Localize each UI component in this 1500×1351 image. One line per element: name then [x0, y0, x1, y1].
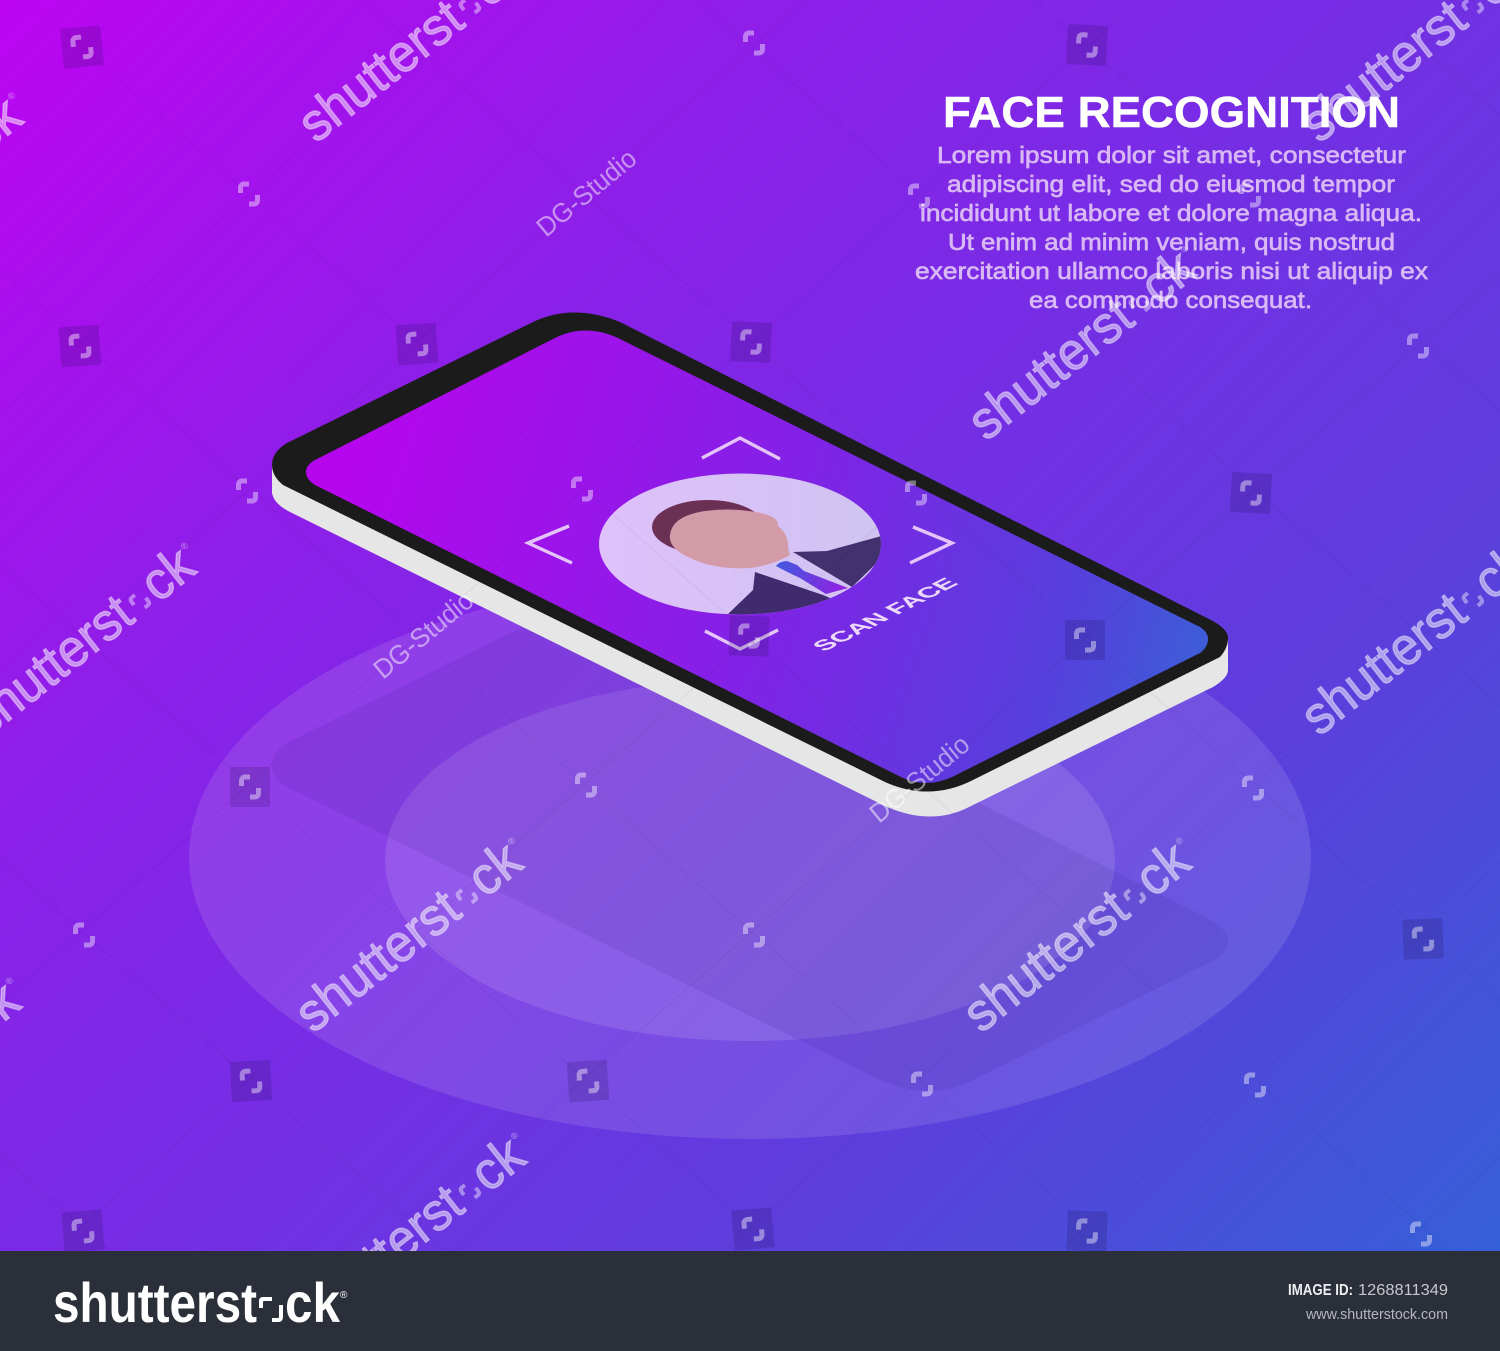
phone screen: [306, 330, 1208, 783]
watermark: DG-Studio marks: DG-Studio: [531, 143, 642, 243]
scan face label: SCAN FACE: [806, 575, 964, 654]
description paragraph: exercitation ullamco laboris nisi ut aliquip ex: [915, 258, 1428, 284]
watermark: DG-Studio marks: DG-Studio: [368, 585, 479, 685]
face avatar: [599, 474, 885, 625]
watermark: DG-Studio marks: DG-Studio: [864, 729, 975, 829]
watermark: DG-Studio marks: [368, 143, 975, 829]
phone side edge: [272, 465, 1228, 817]
title: FACE RECOGNITION: [943, 89, 1400, 137]
description paragraph: [915, 142, 1428, 313]
image id number: 1268811349: [1358, 1282, 1448, 1299]
scan frame: right chevron: [910, 527, 952, 563]
scan frame: left chevron: [528, 526, 572, 563]
footer logo: ck: [285, 1271, 341, 1334]
description paragraph: Lorem ipsum dolor sit amet, consectetur: [937, 142, 1406, 168]
description paragraph: Ut enim ad minim veniam, quis nostrud: [948, 229, 1395, 255]
scan frame: top chevron: [702, 438, 780, 459]
platform: concentric glow ellipses: [189, 575, 1311, 1139]
footer bar: [0, 1251, 1500, 1351]
phone: [272, 312, 1228, 817]
description paragraph: ea commodo consequat.: [1029, 287, 1312, 313]
description paragraph: incididunt ut labore et dolore magna aliqua.: [920, 200, 1422, 226]
footer logo: ®: [340, 1290, 348, 1301]
website url: www.shutterstock.com: [1305, 1307, 1448, 1323]
description paragraph: adipiscing elit, sed do eiusmod tempor: [947, 171, 1395, 197]
footer logo: shutterst: [53, 1271, 257, 1334]
scan frame: bottom chevron: [705, 630, 778, 649]
phone shadow on platform: [272, 612, 1228, 1091]
phone black bezel: [272, 312, 1228, 792]
image id: IMAGE ID:: [1288, 1282, 1353, 1299]
